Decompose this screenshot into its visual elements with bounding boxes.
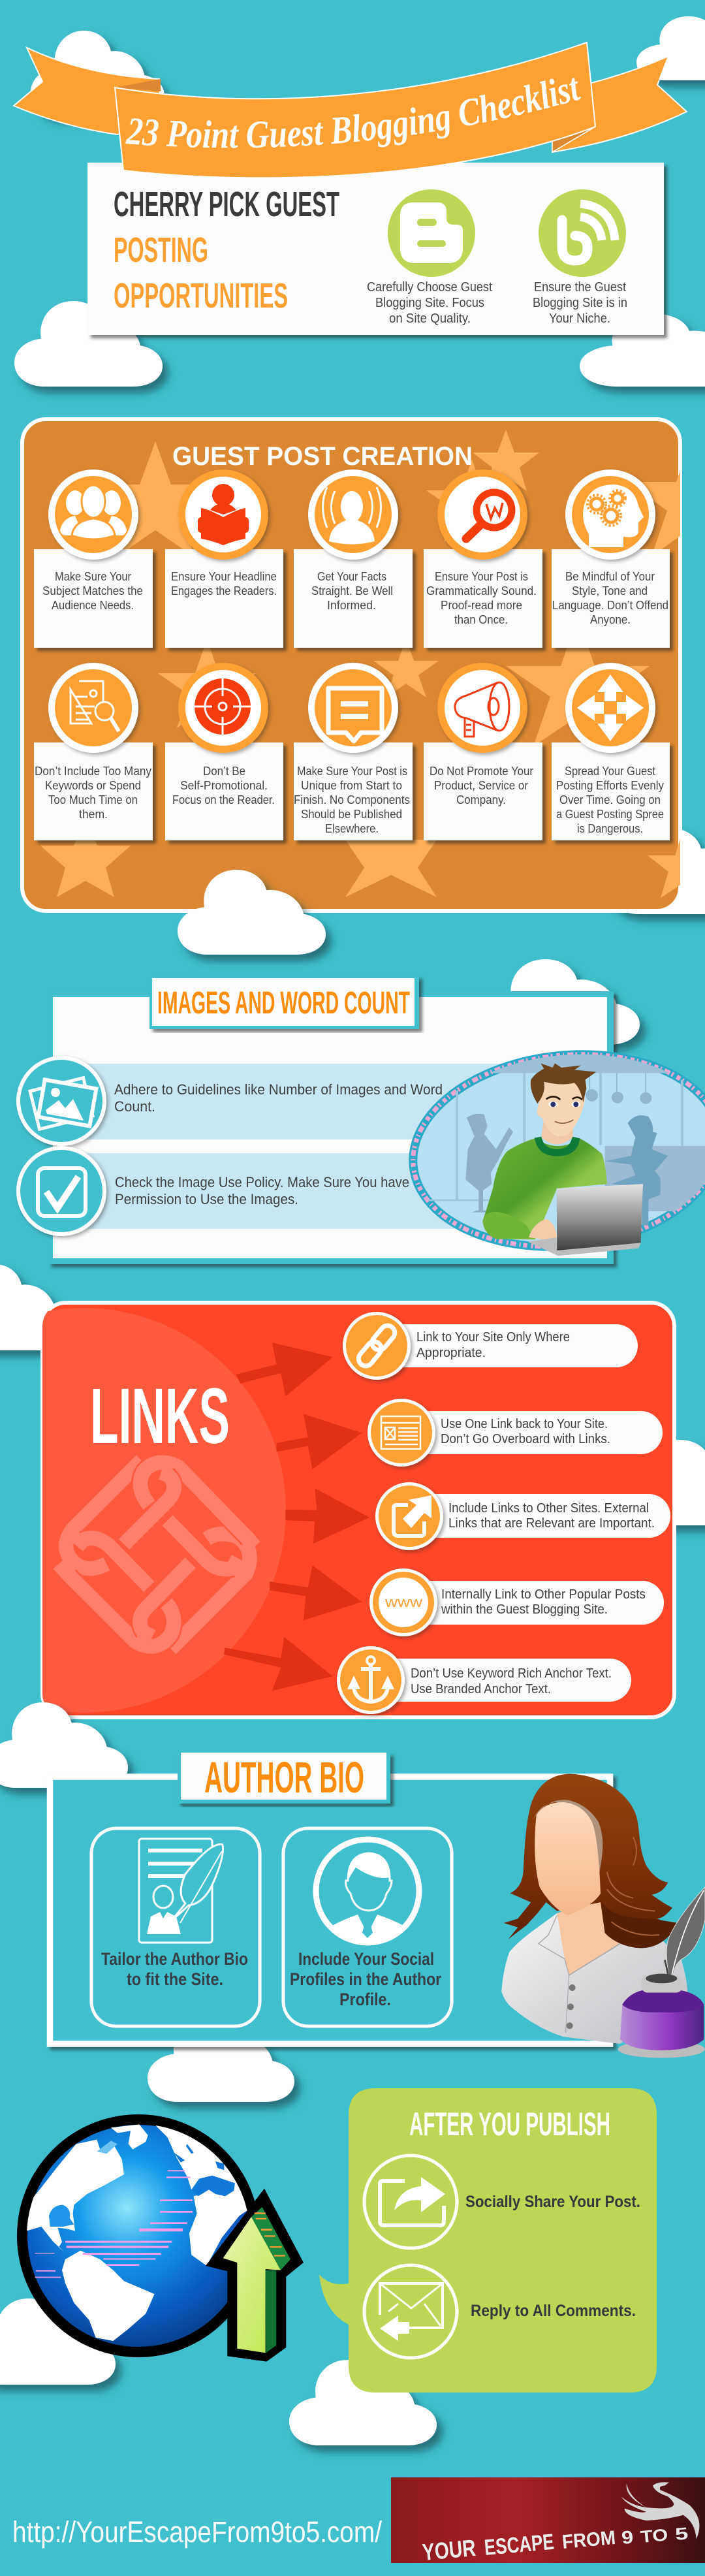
cloud: top left [31, 31, 164, 116]
icon: blogger [388, 189, 475, 277]
item: link only where appropriate [343, 1312, 638, 1380]
card 8: unique: Elsewhere. [325, 821, 379, 835]
card 5: style: Anyone. [590, 612, 631, 626]
card 9: promote: Do Not Promote Your [430, 764, 533, 778]
card 8: unique: Should be Published [301, 807, 402, 821]
item: one link back: Don’t Go Overboard with Links. [441, 1432, 610, 1446]
card 4: grammar: Ensure Your Post is [435, 569, 528, 583]
logo: your escape from 9 to 5 [391, 2477, 705, 2566]
heading: cherry pick guest posting opportunities: OPPORTUNITIES [114, 276, 288, 315]
icon: large chain [59, 1461, 255, 1649]
logo wordmark: 9 [621, 2527, 634, 2548]
text: niche: Your Niche. [549, 311, 610, 326]
item: internal links: within the Guest Blogging Site. [441, 1602, 608, 1617]
card 7: self promotion: Don’t Be [203, 764, 245, 778]
logo wordmark: 5 [674, 2523, 689, 2544]
icon: head with gears [583, 485, 644, 547]
heading box: images and word count: IMAGES AND WORD COUNT [157, 986, 410, 1021]
card 10: spread: is Dangerous. [577, 821, 643, 835]
logo wordmark: YOUR [421, 2534, 477, 2566]
card 7: self promotion [165, 663, 283, 840]
icon: target [195, 678, 251, 735]
heading: cherry pick guest posting opportunities: POSTING [114, 231, 208, 270]
cloud: mid left [14, 301, 163, 387]
cloud: right of links panel [620, 1440, 705, 1525]
card 6: keywords: them. [79, 807, 108, 821]
card 9: promote: Company. [456, 793, 506, 806]
card 10: spread: a Guest Posting Spree [556, 807, 664, 821]
box: tailor author bio: to fit the Site. [127, 1969, 223, 1989]
box: social profiles: Profiles in the Author [290, 1969, 441, 1989]
item: internal links [369, 1568, 664, 1636]
text: niche [533, 280, 627, 326]
card 2: headline: Ensure Your Headline [171, 569, 277, 583]
arrows [224, 1343, 369, 1691]
cloud: top right [636, 16, 705, 80]
heading: cherry pick guest posting opportunities: CHERRY PICK GUEST [114, 185, 339, 224]
text: choose site: Carefully Choose Guest [367, 280, 492, 294]
text: niche: Ensure the Guest [534, 280, 626, 294]
cloud: left of author panel [0, 1702, 128, 1788]
cloud: right of images panel [483, 959, 640, 1045]
card 8: unique: Unique from Start to [301, 778, 402, 792]
item: link only where appropriate: Link to Your Site Only Where [416, 1330, 570, 1344]
item: one link back [368, 1399, 663, 1467]
box: social profiles: Profile. [339, 1990, 391, 2009]
panel: guest post creation [22, 419, 705, 911]
item: external links [375, 1482, 670, 1550]
card 4: grammar [424, 469, 542, 648]
illustration: man with laptop [403, 1040, 705, 1262]
cloud: mid right [580, 313, 705, 387]
icon: document with magnifier [70, 681, 119, 731]
cloud: behind creation panel right [607, 828, 705, 914]
heading box: author bio [178, 1753, 390, 1804]
text: reply to comments: Reply to All Comments. [471, 2302, 636, 2320]
text: choose site: on Site Quality. [389, 311, 471, 326]
logo wordmark: FROM [561, 2527, 616, 2553]
icon: share [364, 2155, 457, 2248]
card 8: unique: Finish. No Components [294, 793, 410, 806]
text: guidelines [114, 1081, 443, 1115]
card 6: keywords: Keywords or Spend [45, 778, 141, 792]
box: tailor author bio [91, 1828, 260, 2026]
icon: speech bubble [328, 688, 382, 741]
icon: blog feed [539, 189, 626, 277]
icon: person with sound waves [322, 487, 381, 545]
card 6: keywords [34, 663, 153, 840]
card 8: unique [294, 663, 413, 840]
background stars [40, 430, 705, 898]
icon: browser window [381, 1416, 420, 1449]
card 5: style [552, 469, 670, 648]
cloud: under author panel [148, 2016, 294, 2102]
card 1: audience: Make Sure Your [55, 569, 131, 583]
logo wordmark [421, 2523, 689, 2566]
panel: after you publish [319, 2088, 657, 2393]
item: link only where appropriate: Appropriate. [416, 1346, 486, 1360]
item: anchor text: Use Branded Anchor Text. [411, 1682, 551, 1696]
card 1: audience: Audience Needs. [52, 598, 134, 612]
icon: chain link [356, 1323, 398, 1369]
card 10: spread: Spread Your Guest [565, 764, 655, 778]
quill [666, 1887, 705, 1983]
card 10: spread: Posting Efforts Evenly [556, 778, 665, 792]
card 4: grammar: Proof-read more [441, 598, 522, 612]
heading: guest post creation: GUEST POST CREATION [172, 442, 473, 471]
icon: four arrows [577, 675, 644, 741]
item: external links: Include Links to Other Sites. External [448, 1501, 649, 1516]
icon: magnifier [466, 492, 512, 539]
text: image policy: Permission to Use the Images. [115, 1191, 298, 1207]
icon: people [60, 485, 127, 539]
band: guidelines background [86, 1064, 503, 1139]
box: tailor author bio: Tailor the Author Bio [101, 1949, 248, 1969]
panel: links [0, 1303, 674, 1717]
icon: anchor [347, 1657, 394, 1703]
card 6: keywords: Don’t Include Too Many [35, 764, 152, 778]
heading: cherry pick guest posting opportunities [114, 185, 339, 315]
icon: www: www [384, 1594, 422, 1610]
cloud: bottom of creation panel [178, 870, 326, 955]
card 6: keywords: Too Much Time on [48, 793, 138, 806]
text: guidelines: Adhere to Guidelines like Number of Images and Word [114, 1081, 443, 1098]
card 9: promote [424, 663, 542, 840]
icon: megaphone [455, 682, 509, 737]
icon: person in circle [316, 1839, 419, 1945]
ink bottle [618, 2041, 705, 2058]
text: socially share: Socially Share Your Post. [465, 2193, 640, 2211]
item: anchor text: Don’t Use Keyword Rich Anchor Text. [411, 1666, 612, 1681]
icon: external link arrow [394, 1495, 431, 1536]
cloud: bottom left [0, 2298, 116, 2385]
text: choose site: Blogging Site. Focus [375, 296, 484, 310]
card 5: style: Style, Tone and [572, 584, 648, 597]
logo swoosh [621, 2482, 699, 2539]
card 8: unique: Make Sure Your Post is [297, 764, 407, 778]
card 10: spread: Over Time. Going on [559, 793, 661, 806]
card 2: headline: Engages the Readers. [171, 584, 277, 597]
panel: cherry pick guest posting opportunities [87, 163, 664, 335]
heading box: images and word count [149, 976, 419, 1029]
text: image policy: Check the Image Use Policy. Make Sure You have [115, 1174, 409, 1190]
item: one link back: Use One Link back to Your Site. [441, 1417, 608, 1431]
logo wordmark: TO [640, 2524, 668, 2547]
card 7: self promotion: Focus on the Reader. [172, 793, 275, 806]
heading: links: LINKS [90, 1371, 230, 1460]
card 5: style: Language. Don’t Offend [552, 598, 668, 612]
card 5: style: Be Mindful of Your [565, 569, 655, 583]
icon: reply mail [364, 2265, 457, 2358]
card 4: grammar: Grammatically Sound. [426, 584, 537, 597]
panel: author bio [50, 1753, 705, 2058]
card 1: audience: Subject Matches the [42, 584, 143, 597]
card 4: grammar: than Once. [454, 612, 508, 626]
box: social profiles [283, 1828, 452, 2026]
item: external links: Links that are Relevant are Important. [448, 1516, 655, 1531]
cloud: under after you publish [289, 2360, 437, 2445]
panel: images and word count [16, 976, 705, 1264]
card 10: spread [552, 663, 670, 840]
card 2: headline [165, 469, 283, 648]
logo wordmark: ESCAPE [483, 2530, 555, 2560]
text: image policy [115, 1174, 409, 1207]
card 3: facts [294, 469, 413, 648]
text: choose site [367, 280, 492, 326]
icon: document with quill [139, 1839, 223, 1943]
card 3: facts: Straight. Be Well [311, 584, 393, 597]
website url: http://YourEscapeFrom9to5.com/ [12, 2515, 382, 2549]
card 3: facts: Informed. [327, 598, 376, 612]
item: anchor text [337, 1646, 631, 1714]
box: social profiles: Include Your Social [298, 1949, 434, 1969]
text: niche: Blogging Site is in [533, 296, 627, 310]
heading box: author bio: AUTHOR BIO [204, 1753, 364, 1802]
card 1: audience [34, 469, 153, 648]
title ribbon [12, 42, 688, 178]
band: image policy background [86, 1153, 503, 1229]
text: guidelines: Count. [114, 1098, 155, 1115]
item: internal links: Internally Link to Other Popular Posts [441, 1587, 646, 1602]
icon: photos [16, 1056, 106, 1146]
illustration: globe with up arrow [22, 2120, 304, 2362]
title text: 23 Point Guest Blogging Checklist [125, 78, 581, 148]
card 9: promote: Product, Service or [434, 778, 528, 792]
cloud: left of links panel [0, 1264, 75, 1350]
card 7: self promotion: Self-Promotional. [180, 778, 268, 792]
icon: checkbox [16, 1146, 106, 1236]
icon: reader with book [198, 484, 249, 545]
card 3: facts: Get Your Facts [317, 569, 386, 583]
illustration: woman with quill and ink [501, 1774, 705, 2058]
